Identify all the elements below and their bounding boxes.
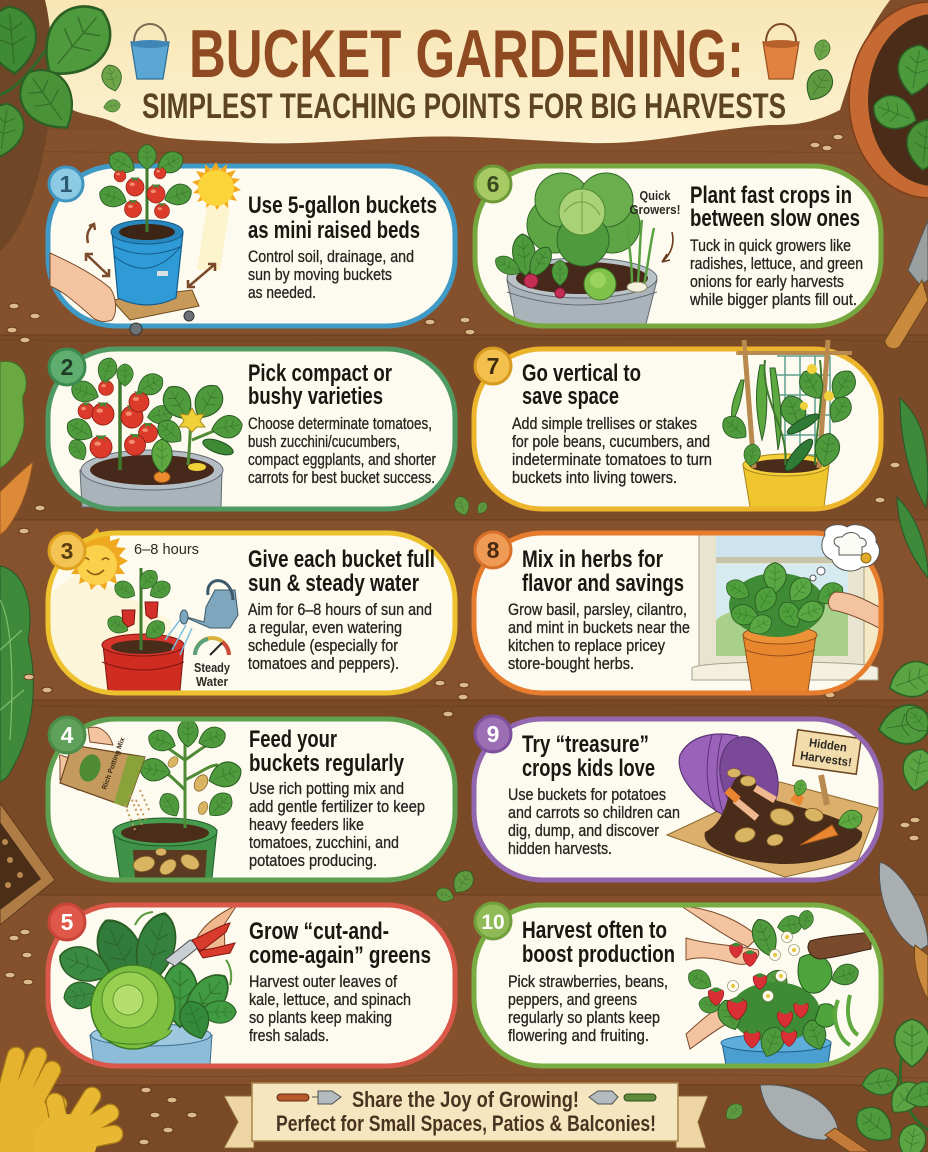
label: quick growers [630, 189, 680, 217]
heading: as mini raised beds [248, 217, 420, 244]
heading: Give each bucket full [248, 546, 435, 573]
body text [248, 415, 436, 487]
body text [249, 780, 425, 870]
illustration: fertilizer bag, plant and green bucket: Rich Potting Mix [101, 737, 127, 791]
heading [249, 726, 405, 777]
body text: as needed. [248, 284, 316, 302]
heading: bushy varieties [248, 383, 383, 410]
badge 9 [475, 716, 511, 752]
label: steady water: Steady [194, 660, 231, 675]
decoration: soil tray [0, 803, 55, 925]
decoration: top right terracotta pot [849, 2, 928, 198]
title bucket icon orange [763, 24, 799, 79]
heading [248, 546, 435, 597]
badge 4 [49, 717, 85, 753]
body text: tomatoes, zucchini, and [249, 834, 399, 852]
icon: right trowel [589, 1091, 656, 1104]
illustration: window, herbs in orange bucket and hand [692, 533, 881, 691]
body text: indeterminate tomatoes to turn [512, 451, 712, 469]
panel 1 [48, 144, 455, 335]
label: steady water: Water [196, 674, 228, 689]
badge 1: 1 [60, 171, 73, 197]
illustration: cabbage, radishes, lettuce and onions in bucket [492, 173, 673, 324]
body text: Control soil, drainage, and [248, 248, 414, 266]
panel 6 border [475, 166, 881, 326]
heading: Try “treasure” [522, 731, 649, 758]
panel 9 [474, 716, 881, 880]
banner text: Perfect for Small Spaces, Patios & Balconies! [276, 1111, 656, 1136]
illustration: tipped purple bucket, soil, potatoes and sign [667, 730, 878, 877]
panel 5 border [48, 905, 455, 1066]
badge 10: 10 [481, 911, 505, 934]
body text: onions for early harvests [690, 273, 844, 291]
arrows around bucket [86, 224, 215, 287]
body text: Aim for 6–8 hours of sun and [248, 601, 432, 619]
badge 7: 7 [487, 353, 499, 379]
title leaves [99, 38, 838, 113]
body text: potatoes producing. [249, 852, 377, 870]
heading: buckets regularly [249, 750, 405, 777]
illustration: strawberry pepper plant with harvesting hands [681, 906, 871, 1065]
body text: tomatoes and peppers). [248, 655, 399, 673]
panel 2 [48, 349, 455, 509]
heading: Harvest often to [522, 917, 667, 944]
body text: carrots for best bucket success. [248, 469, 435, 487]
heading: Plant fast crops in [690, 182, 852, 209]
panel 7 [474, 340, 881, 509]
badge 9: 9 [487, 721, 499, 747]
body text: a regular, even watering [248, 619, 402, 637]
panel 6 [475, 166, 881, 326]
panel 3 [40, 528, 455, 693]
heading: Grow “cut-and- [249, 918, 389, 945]
heading: Pick compact or [248, 360, 392, 387]
body text: kale, lettuce, and spinach [249, 991, 411, 1009]
panel 8 [474, 525, 881, 693]
body text: schedule (especially for [248, 637, 398, 655]
body text: flowering and fruiting. [508, 1027, 649, 1045]
body text: compact eggplants, and shorter [248, 451, 436, 469]
panel 4 border [48, 719, 455, 880]
body text: hidden harvests. [508, 840, 612, 858]
badge 6 [475, 166, 511, 202]
banner text [276, 1087, 656, 1136]
label: quick growers: Growers! [630, 203, 680, 217]
badge 8 [475, 532, 511, 568]
body text: kitchen to replace pricey [508, 637, 666, 655]
illustration: tipped purple bucket, soil, potatoes and sign: Harvests! [799, 748, 853, 769]
body text: peppers, and greens [508, 991, 637, 1009]
panel 10 border [474, 905, 881, 1066]
thought bubble with chef hat [822, 525, 879, 571]
badge 3: 3 [61, 538, 73, 564]
heading: Mix in herbs for [522, 546, 663, 573]
body text: so plants keep making [249, 1009, 392, 1027]
badge 2 [49, 349, 85, 385]
body text: Use buckets for potatoes [508, 786, 666, 804]
body text: add gentle fertilizer to keep [249, 798, 425, 816]
badge 5 [49, 904, 85, 940]
banner text: Share the Joy of Growing! [352, 1087, 579, 1112]
illustration: blue bucket on dolly with tomato plant [50, 144, 241, 335]
heading [690, 182, 860, 232]
illustration: tomato and zucchini in bucket [63, 355, 244, 507]
illustration: trellis with beans and cucumber in yellow bucket [718, 340, 860, 507]
badge 10 [475, 903, 511, 939]
body text: heavy feeders like [249, 816, 364, 834]
body text: Add simple trellises or stakes [512, 415, 697, 433]
panel 5 [48, 904, 455, 1066]
body text [508, 601, 690, 673]
body text: and carrots so children can [508, 804, 680, 822]
decoration: top left pot and leaves [0, 0, 125, 252]
body text: Use rich potting mix and [249, 780, 404, 798]
heading [248, 360, 392, 410]
heading [248, 192, 437, 244]
label: quick growers: Quick [640, 189, 671, 203]
body text [512, 415, 712, 487]
body text: Grow basil, parsley, cilantro, [508, 601, 687, 619]
decoration: yellow gloves [0, 1056, 114, 1152]
icon: left trowel [277, 1091, 341, 1104]
heading: Feed your [249, 726, 337, 753]
body text: dig, dump, and discover [508, 822, 659, 840]
badge 6: 6 [487, 171, 499, 197]
decoration: right side leaves [875, 398, 928, 793]
panel 2 border [48, 349, 455, 509]
body text: for pole beans, cucumbers, and [512, 433, 710, 451]
heading: boost production [522, 941, 675, 968]
body text: Pick strawberries, beans, [508, 973, 668, 991]
panel 9 border [474, 719, 881, 880]
badge 2: 2 [61, 354, 73, 380]
body text: and mint in buckets near the [508, 619, 690, 637]
badge 8: 8 [487, 537, 500, 563]
badge 5: 5 [61, 909, 74, 935]
badge 3 [49, 533, 85, 569]
trellis top overlapping border [738, 340, 852, 372]
header cream banner [30, 0, 890, 143]
title bucket icon blue [131, 24, 169, 79]
decoration: garden trowel lower right [879, 862, 928, 1000]
body text: radishes, lettuce, and green [690, 255, 863, 273]
decoration: left side greens and carrot [0, 361, 33, 782]
panel 4 [48, 717, 455, 880]
body text: regularly so plants keep [508, 1009, 660, 1027]
body text [248, 248, 414, 302]
decoration: bottom right plant [849, 1019, 928, 1152]
heading: save space [522, 383, 619, 410]
illustration: fertilizer bag, plant and green bucket [59, 719, 245, 878]
body text [249, 973, 411, 1045]
panel 7 border [474, 349, 881, 509]
illustration: tipped purple bucket, soil, potatoes and sign: Hidden [808, 735, 848, 755]
bottom ribbon banner [224, 1083, 708, 1148]
heading [522, 917, 675, 968]
body text [508, 786, 680, 858]
body text: buckets into living towers. [512, 469, 677, 487]
heading [522, 731, 655, 782]
body text [689, 237, 863, 309]
title: BUCKET GARDENING: [189, 16, 744, 92]
panel 8 border [474, 533, 881, 693]
body text: sun by moving buckets [248, 266, 392, 284]
body text: bush zucchini/cucumbers, [248, 433, 400, 451]
body text [248, 601, 432, 673]
heading: Use 5-gallon buckets [248, 192, 437, 219]
heading [522, 360, 641, 410]
heading: crops kids love [522, 755, 655, 782]
body text: store-bought herbs. [508, 655, 634, 673]
heading: sun & steady water [248, 570, 419, 597]
heading [249, 918, 431, 969]
illustration: sun, pepper plant, watering can [40, 528, 238, 691]
heading: come-again” greens [249, 942, 431, 969]
badge 7 [475, 348, 511, 384]
badge 1 [49, 167, 83, 201]
heading: Go vertical to [522, 360, 641, 387]
heading: between slow ones [690, 205, 860, 232]
panel 10 [474, 903, 881, 1066]
body text [508, 973, 668, 1045]
label: steady water [194, 660, 231, 689]
decoration: garden trowel bottom [760, 1085, 870, 1152]
decoration: garden trowel upper right [885, 220, 928, 349]
body text: Choose determinate tomatoes, [248, 415, 432, 433]
body text: Tuck in quick growers like [690, 237, 851, 255]
label: 6-8 hours: 6–8 hours [134, 542, 199, 558]
panel 3 border [48, 533, 455, 693]
heading [522, 546, 684, 597]
body text: while bigger plants fill out. [689, 291, 857, 309]
heading: flavor and savings [522, 570, 684, 597]
body text: fresh salads. [249, 1027, 329, 1045]
illustration: greens, shears and blue bucket [54, 905, 237, 1065]
body text: Harvest outer leaves of [249, 973, 397, 991]
badge 4: 4 [61, 722, 74, 748]
